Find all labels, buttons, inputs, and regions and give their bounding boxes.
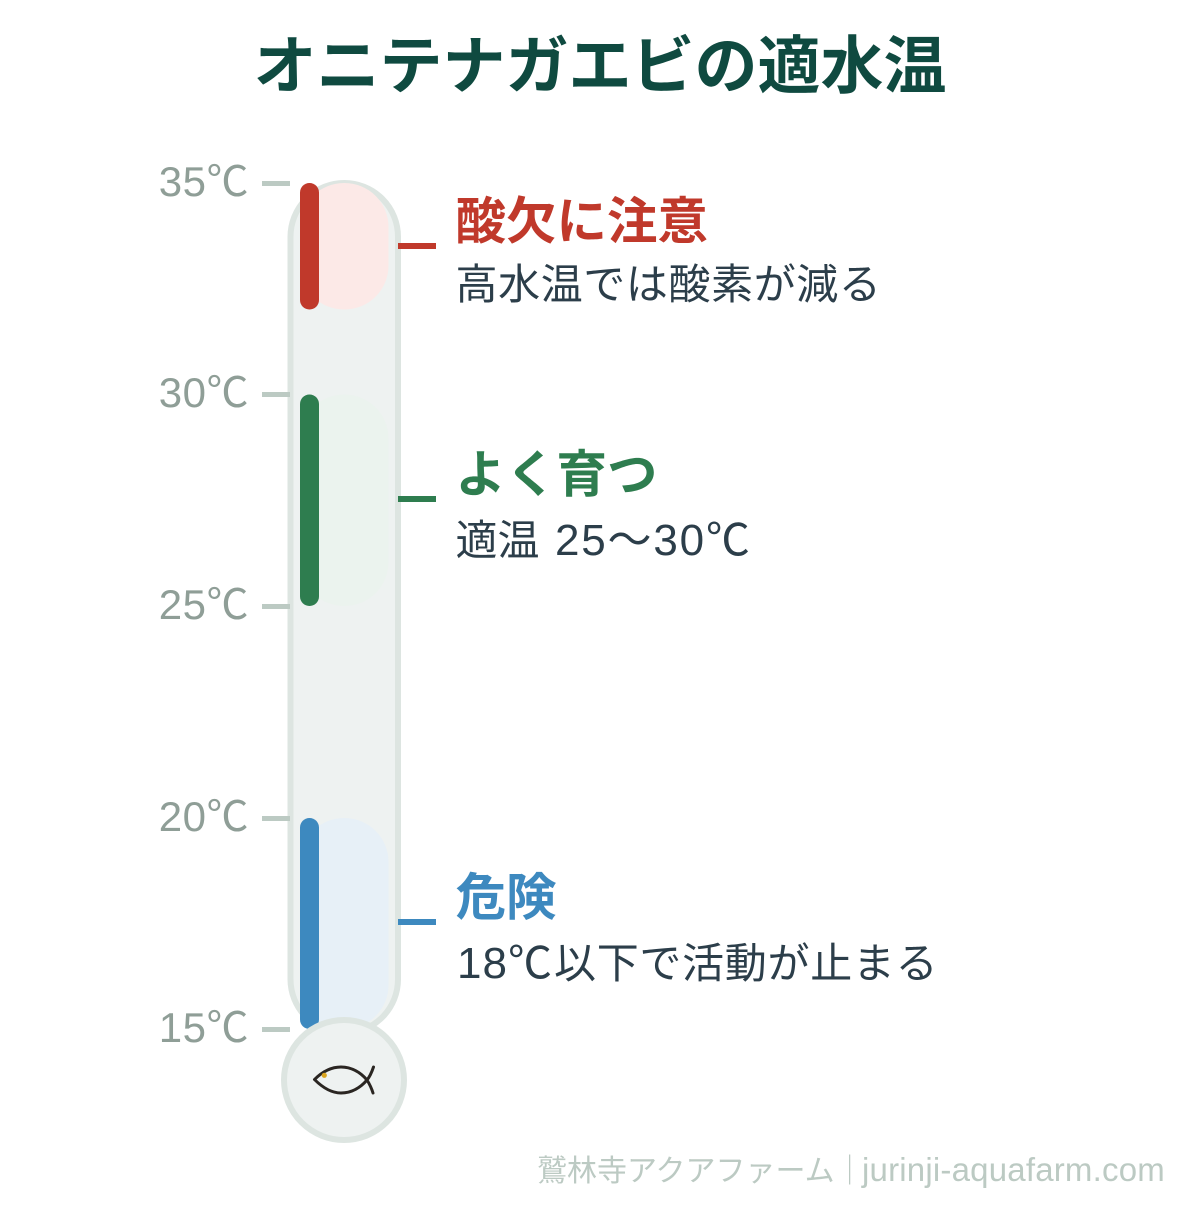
label: 35: 35℃ <box>159 158 249 205</box>
callout: optimal <box>398 446 752 565</box>
band: danger zone <box>300 818 388 1029</box>
bar: danger <box>300 818 319 1029</box>
callout text: 以下で活動が止まる <box>554 940 938 987</box>
callout heading: 酸欠に注意 <box>456 193 708 250</box>
temperature scale <box>159 158 290 1051</box>
callout text: 25〜30℃ <box>555 516 752 565</box>
band: optimal zone <box>300 394 388 606</box>
callout heading: 危険 <box>456 869 556 926</box>
title: オニテナガエビの適水温 <box>254 32 946 102</box>
callout text: 高水温では酸素が減る <box>456 261 882 308</box>
icon: fish <box>314 1067 374 1093</box>
band: hypoxia zone <box>300 183 388 310</box>
callout heading: よく育つ <box>456 446 658 503</box>
footer credit: 鷲林寺アクアファーム｜ <box>537 1155 865 1188</box>
callout text: 適温 <box>456 517 540 564</box>
bar: hypoxia <box>300 183 319 310</box>
footer credit: jurinji-aquafarm.com <box>861 1151 1165 1188</box>
bar: optimal <box>300 394 319 606</box>
label: 30: 30℃ <box>159 369 249 416</box>
thermometer tube <box>290 183 398 1033</box>
label: 25: 25℃ <box>159 581 249 628</box>
label: 20: 20℃ <box>159 793 249 840</box>
thermometer bulb <box>284 1020 404 1140</box>
label: 15: 15℃ <box>159 1004 249 1051</box>
callout: hypoxia <box>398 193 882 308</box>
callout text: 18℃ <box>457 939 553 988</box>
callout: danger <box>398 869 938 988</box>
